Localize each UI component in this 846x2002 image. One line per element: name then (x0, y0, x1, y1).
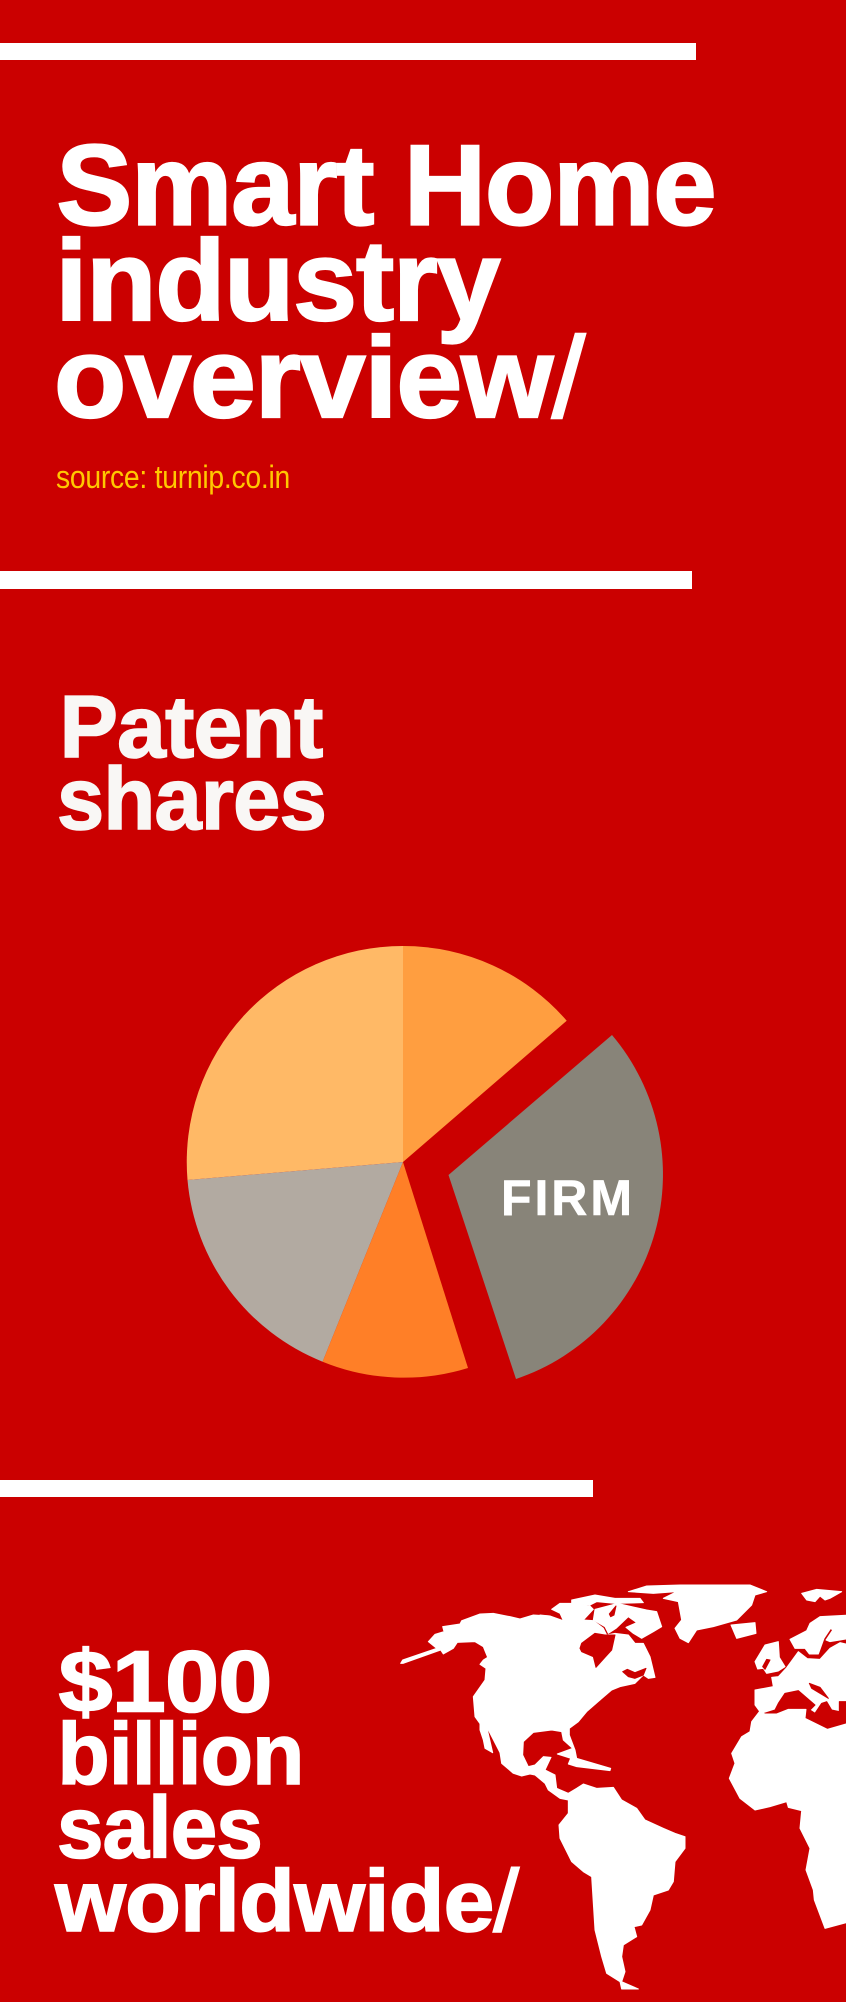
heading: sales (54, 1634, 520, 1950)
heading: sales: billion (58, 1706, 304, 1803)
pie chart (187, 946, 663, 1379)
slice: medium orange (403, 946, 567, 1162)
world map (401, 1585, 846, 1989)
scandinavia (790, 1615, 846, 1654)
heading: patent shares: shares (57, 749, 326, 848)
slice: light orange (187, 946, 403, 1180)
south america (559, 1784, 685, 1989)
title: industry (56, 218, 500, 345)
arctic strip (572, 1595, 643, 1605)
gulf of st lawrence (623, 1668, 646, 1678)
greenland (628, 1585, 767, 1643)
heading: patent shares (57, 677, 326, 848)
north america east and arctic (540, 1595, 662, 1700)
slice: firm (448, 1035, 663, 1379)
continental europe (755, 1643, 846, 1743)
africa (729, 1709, 846, 1928)
mediterranean sea (764, 1691, 846, 1733)
heading: sales: $100 (58, 1634, 272, 1730)
source text: source: turnip.co.in (56, 459, 290, 495)
europe and north atlantic islands (731, 1589, 846, 1743)
hudson bay (580, 1633, 615, 1667)
slice label: firm: FIRM (501, 1170, 632, 1226)
baffin and arctic islands (593, 1603, 662, 1638)
heading: sales: worldwide/ (54, 1853, 520, 1950)
heading: sales: sales (57, 1780, 262, 1876)
iceland (731, 1623, 756, 1638)
title: Smart Home (56, 122, 716, 250)
adriatic sea (809, 1683, 828, 1698)
title (54, 122, 716, 442)
canadian mainland (540, 1603, 655, 1700)
title: overview/ (54, 315, 585, 442)
slice: beige grey (188, 1162, 403, 1362)
british isles (755, 1642, 785, 1673)
united states, mexico and central america (480, 1698, 611, 1800)
north america west (401, 1613, 550, 1730)
heading: patent shares: Patent (60, 677, 323, 776)
svalbard (802, 1589, 842, 1602)
slice: dark orange (323, 1162, 468, 1378)
